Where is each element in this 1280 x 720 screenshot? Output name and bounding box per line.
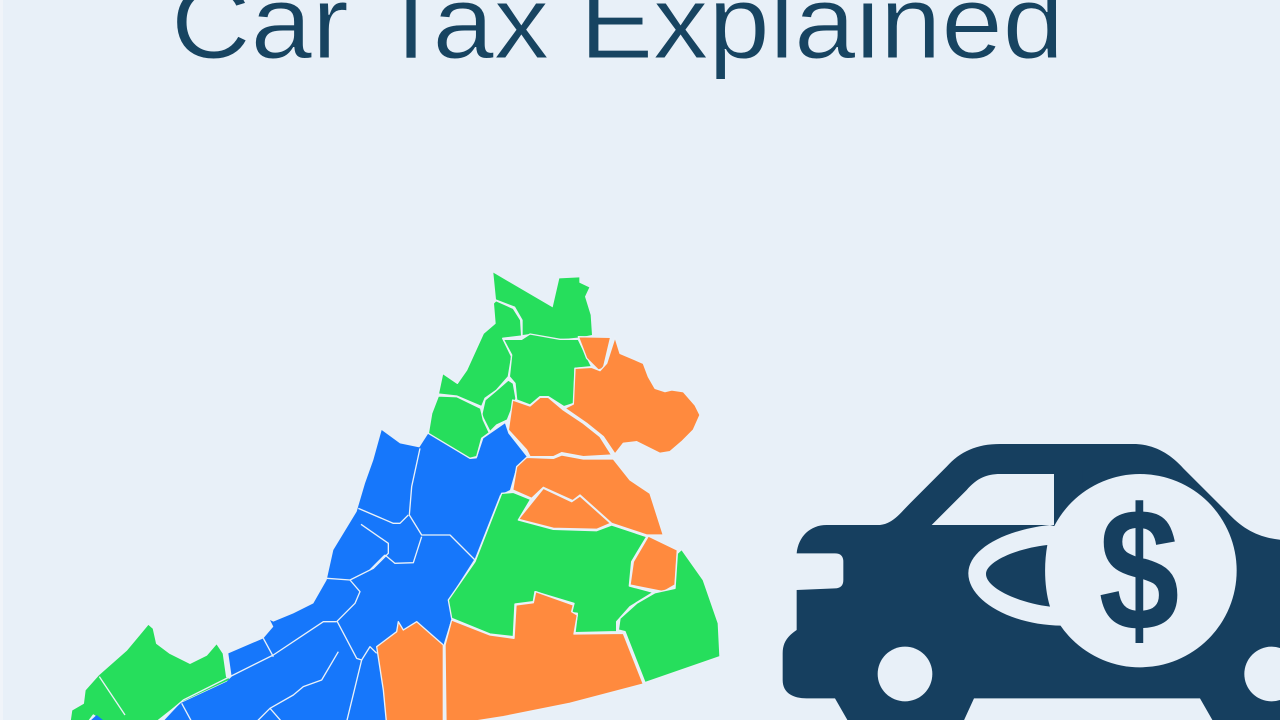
region: green northern counties	[428, 273, 592, 458]
map: county tax regions	[70, 273, 720, 720]
region: orange northern counties	[508, 337, 700, 592]
icon: car with dollar badge	[783, 444, 1280, 720]
region: far west green counties	[70, 624, 232, 720]
map: northern and eastern counties	[377, 273, 720, 720]
region: green south-eastern counties	[448, 492, 720, 683]
region: orange southern counties	[377, 592, 643, 720]
dollar sign: $	[1099, 472, 1179, 668]
car body	[783, 444, 1280, 720]
map: western blue and green counties	[70, 423, 527, 720]
region: blue counties	[89, 423, 527, 720]
